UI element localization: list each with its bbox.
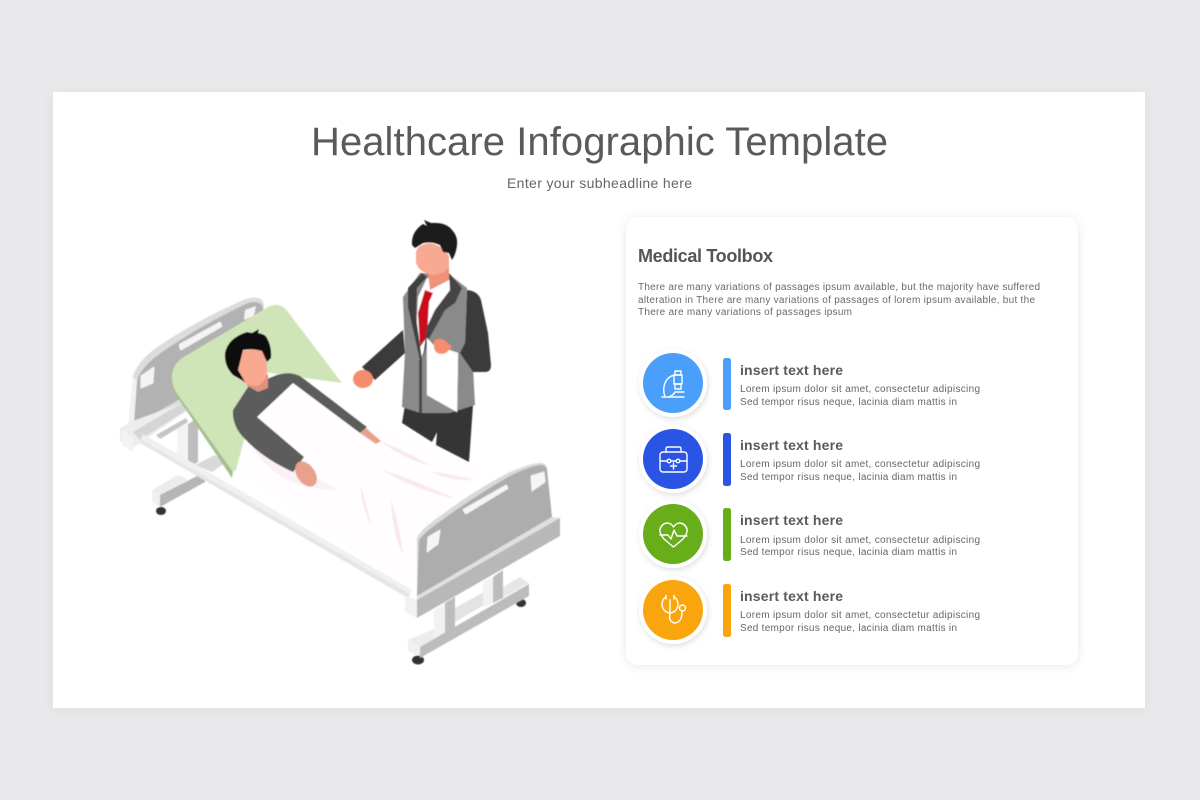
side rail [140, 434, 412, 598]
item 4 text: Lorem ipsum dolor sit amet, consectetur adipiscing [740, 610, 980, 621]
icon: heartbeat [660, 523, 687, 547]
panel description [638, 282, 1040, 318]
doctor [353, 220, 491, 462]
doctor right arm [460, 290, 491, 372]
panel description: There are many variations of passages ipsum available, but the majority have suffered [638, 282, 1040, 293]
item 3 text: Lorem ipsum dolor sit amet, consectetur adipiscing [740, 535, 980, 546]
item 3 text: insert text here [740, 512, 843, 528]
item 1 bar [723, 358, 731, 410]
bed foot frame [405, 463, 560, 664]
patient hair [225, 329, 271, 382]
item 2: toolbox [639, 425, 980, 493]
doctor neck [428, 268, 449, 290]
icon: microscope [662, 371, 684, 397]
subheadline: Enter your subheadline here [507, 175, 692, 191]
item 4 text: Sed tempor risus neque, lacinia diam mattis in [740, 623, 957, 634]
item 4 bar [723, 584, 731, 637]
item 3 bar [723, 508, 731, 561]
item 1 text: Lorem ipsum dolor sit amet, consectetur adipiscing [740, 384, 980, 395]
item 1 text: Sed tempor risus neque, lacinia diam mattis in [740, 397, 957, 408]
panel heading: Medical Toolbox [638, 246, 773, 266]
item 2 text [740, 437, 980, 483]
doctor lapels [408, 273, 427, 360]
doctor hand on paper [434, 339, 452, 354]
panel: medical toolbox [626, 217, 1078, 665]
panel description: alteration in There are many variations of passages of lorem ipsum available, but the [638, 295, 1035, 306]
doctor face [416, 243, 449, 275]
title: Healthcare Infographic Template [311, 120, 888, 164]
doctor shirt [416, 278, 450, 358]
background slide card [53, 92, 1145, 708]
doctor jacket [402, 273, 475, 413]
item 1 text [740, 362, 980, 408]
doctor tie [418, 290, 433, 347]
mattress and blanket [232, 378, 482, 590]
item 4 text [740, 588, 980, 634]
illustration: hospital bed scene [120, 220, 560, 664]
patient face [238, 350, 267, 386]
pillow [171, 305, 342, 478]
icon: medical case [660, 447, 687, 472]
item 2 text: Sed tempor risus neque, lacinia diam mattis in [740, 472, 957, 483]
item 2 text: Lorem ipsum dolor sit amet, consectetur adipiscing [740, 459, 980, 470]
item 2 text: insert text here [740, 437, 843, 453]
doctor hair [412, 220, 457, 260]
patient hands [291, 457, 321, 491]
item 2 bar [723, 433, 731, 486]
icon: stethoscope [662, 596, 686, 623]
doctor left arm [362, 330, 405, 380]
doctor pants [402, 405, 473, 462]
doctor paper [427, 338, 458, 412]
bed head frame [120, 297, 264, 515]
item 3: heart [639, 500, 980, 568]
item 3 text: Sed tempor risus neque, lacinia diam mattis in [740, 547, 957, 558]
patient [225, 329, 381, 491]
panel description: There are many variations of passages ipsum [638, 307, 852, 318]
item 4: stethoscope [639, 576, 980, 644]
patient body [233, 373, 367, 472]
item 1: microscope [639, 349, 980, 417]
patient neck [246, 374, 268, 392]
item 4 text: insert text here [740, 588, 843, 604]
item 1 text: insert text here [740, 362, 843, 378]
item 3 text [740, 512, 980, 558]
